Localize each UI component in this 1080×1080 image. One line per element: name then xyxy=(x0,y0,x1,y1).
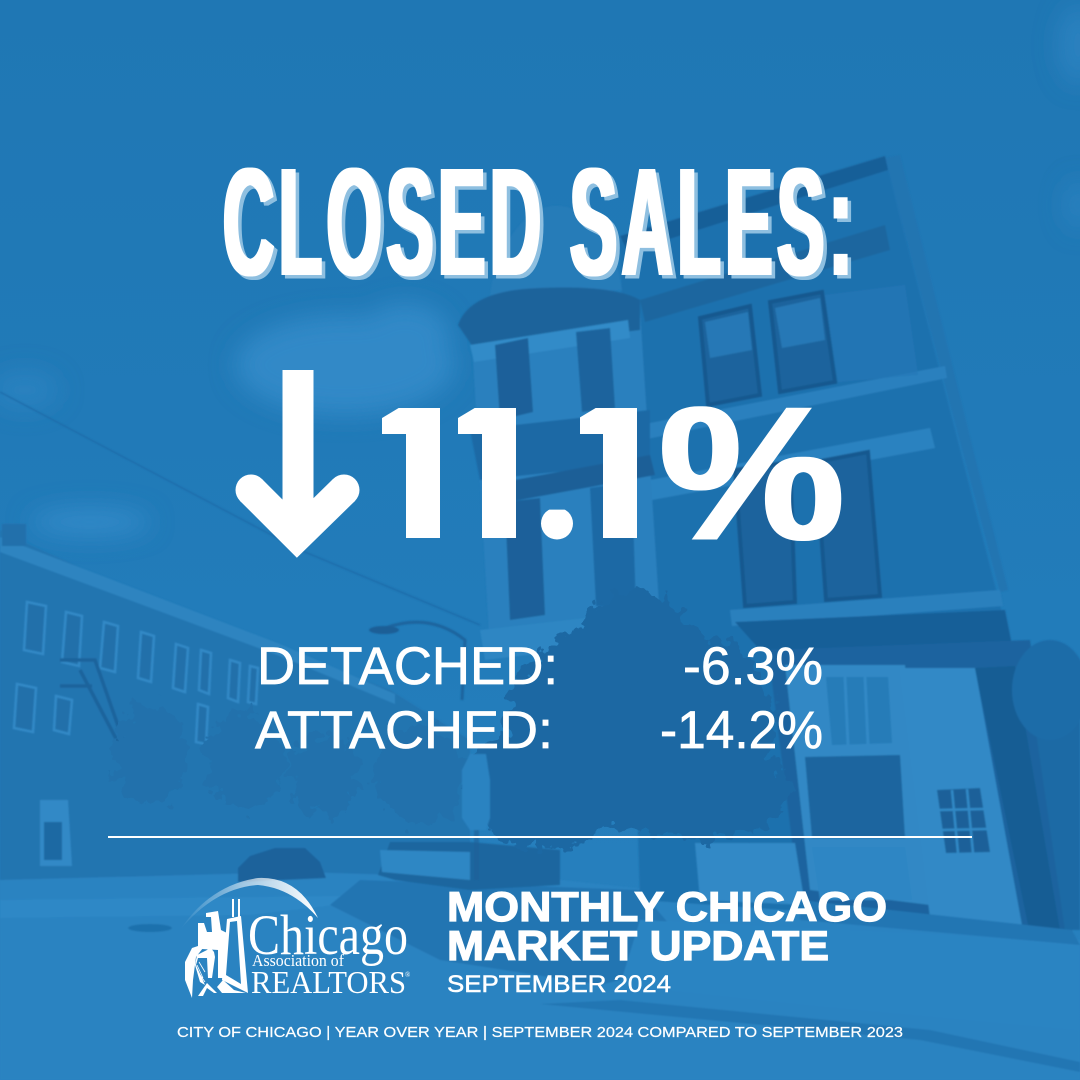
parked car xyxy=(238,848,326,882)
detached label: DETACHED: xyxy=(257,637,558,696)
icon: down arrow xyxy=(236,370,360,536)
upper windows xyxy=(700,292,880,606)
logo arc xyxy=(180,878,318,930)
logo house and figure xyxy=(185,946,246,998)
street lamp xyxy=(385,622,465,700)
logo wordmark: ® xyxy=(405,971,411,979)
logo: Chicago Association of Realtors xyxy=(180,878,411,1000)
logo skyline xyxy=(198,899,248,993)
left building windows xyxy=(14,602,258,744)
sky clouds xyxy=(0,5,1080,536)
right background tree xyxy=(1012,640,1080,740)
lower door panels xyxy=(695,843,805,905)
logo wordmark xyxy=(248,904,411,1000)
facade bands xyxy=(640,366,947,440)
street trees with leafy edges xyxy=(112,592,790,850)
heading line one: MONTHLY CHICAGO xyxy=(447,883,887,930)
date line: SEPTEMBER 2024 xyxy=(447,971,671,998)
overhead wires xyxy=(0,392,480,625)
heading line two: MARKET UPDATE xyxy=(447,922,829,969)
main building facade xyxy=(620,158,1072,930)
door window grid xyxy=(937,788,990,853)
fire escape xyxy=(60,660,130,760)
heading: monthly chicago market update xyxy=(447,883,887,998)
figure digits: 11.1 xyxy=(357,367,669,579)
transom xyxy=(826,677,892,745)
logo wordmark: Association of xyxy=(252,951,344,970)
ground xyxy=(0,872,1080,1080)
footer note: CITY OF CHICAGO | YEAR OVER YEAR | SEPTEMBER 2024 COMPARED TO SEPTEMBER 2023 xyxy=(177,1024,903,1041)
detached value: -6.3% xyxy=(683,637,823,696)
figure percent sign: % xyxy=(659,368,845,580)
attached value: -14.2% xyxy=(660,701,823,760)
door xyxy=(40,800,72,866)
headline figure: 11.1% xyxy=(382,406,842,541)
distant street front xyxy=(120,790,410,875)
big window xyxy=(805,755,905,838)
lower storefront xyxy=(768,640,1072,930)
parked suv xyxy=(378,842,560,890)
logo wordmark: Chicago xyxy=(248,904,408,967)
corner turret xyxy=(472,310,660,650)
logo wordmark: REALTORS xyxy=(251,964,406,1000)
attached label: ATTACHED: xyxy=(255,701,553,760)
stop sign xyxy=(462,754,490,880)
left brick building xyxy=(0,530,470,880)
breakdown: detached and attached xyxy=(255,637,823,760)
